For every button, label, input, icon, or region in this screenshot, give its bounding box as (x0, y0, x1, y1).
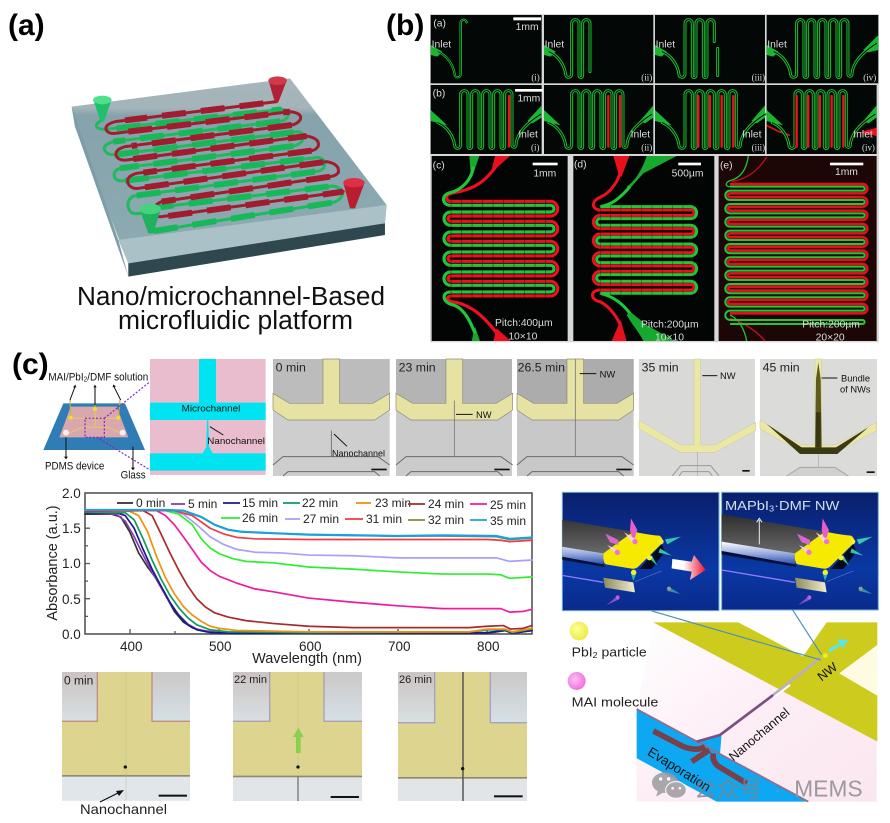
micrograph: 45 min: Bundle (841, 373, 870, 383)
row a: panel i: 1mm (516, 22, 539, 33)
legend: PbI2 particle: PbI (572, 646, 591, 660)
inset title: MAPbI (725, 499, 763, 513)
row a: panel ii (544, 15, 653, 83)
legend: MAI molecule: MAI molecule (572, 695, 658, 709)
legend: 25 min (490, 498, 526, 512)
legend: 0 min (136, 496, 165, 510)
glass plate (43, 403, 145, 450)
row b: panel iv: Inlet (853, 130, 873, 141)
row a: panel i: (i) (531, 73, 540, 83)
x axis tick labels: 600 (299, 639, 322, 654)
micrograph: 35 min: 35 min (642, 360, 679, 374)
row a: panel iv: Inlet (767, 39, 787, 50)
watermark: MEMS (794, 775, 863, 801)
inlet cone: green rear (93, 96, 112, 122)
row a: panel i: Inlet (432, 39, 451, 50)
legend (117, 496, 526, 528)
panel d: pitch 200 um: 10×10 (655, 333, 684, 344)
diagram: pink microchannel and nanochannel: Microchannel (182, 404, 240, 414)
green channel (96, 109, 342, 232)
legend: 32 min (428, 513, 464, 527)
diagram: pink microchannel and nanochannel (150, 359, 266, 475)
row a: panel iv (767, 15, 878, 83)
panel: fluorescence micrographs (b) (430, 14, 879, 344)
row b: panel i: Inlet (518, 130, 538, 141)
y axis tick labels: 1.5 (62, 521, 81, 536)
label: nanochannel with arrow: Nanochannel (80, 801, 167, 817)
micrograph: 26.5 min: 26.5 min (518, 360, 565, 374)
legend: MAI molecule (568, 672, 658, 709)
x axis tick labels: 500 (209, 639, 232, 654)
inset title: 3 (769, 505, 775, 514)
schematic: PDMS device on glass (43, 371, 150, 481)
legend: 5 min (188, 497, 217, 511)
y axis tick labels: 1.0 (62, 556, 81, 571)
micrograph: 35 min (639, 359, 756, 476)
row a: panel ii: (ii) (641, 73, 652, 83)
panel e: pitch 200 um, 20x20: Pitch:200µm (802, 320, 860, 331)
connector lines (652, 610, 822, 660)
row b: panel iii: (iii) (752, 143, 765, 153)
red channel (106, 102, 343, 217)
panel d: pitch 200 um: 500µm (672, 169, 703, 180)
micrograph: top-view 0 min: 0 min (64, 673, 93, 687)
row b: panel ii: (ii) (641, 143, 652, 153)
panel e: pitch 200 um, 20x20: 20×20 (816, 333, 845, 344)
panel d: pitch 200 um (573, 156, 714, 344)
solution label: /DMF solution (87, 371, 148, 383)
row a: panel i: (a) (433, 18, 446, 29)
label: (a): (a) (8, 9, 45, 42)
watermark (652, 772, 863, 803)
micrograph: 35 min: NW (720, 371, 736, 381)
chip body (72, 78, 387, 277)
micrograph: 23 min: NW (476, 410, 492, 420)
micrograph: 0 min: 0 min (276, 360, 306, 374)
inset: growth step 1 (562, 492, 720, 612)
panel c: pitch 400 um: Pitch:400µm (495, 318, 553, 329)
arrow: direction of growth (672, 555, 706, 580)
label: Nanochannel: Nanochannel (726, 705, 792, 764)
solution label: 2 (84, 377, 87, 384)
micrograph: 26.5 min: NW (600, 370, 615, 380)
panel e: pitch 200 um, 20x20: 1mm (835, 167, 858, 178)
chart: absorbance versus wavelength (45, 486, 532, 667)
panel d: pitch 200 um: Pitch:200µm (641, 320, 699, 331)
legend: 22 min (302, 496, 338, 510)
row b: panel ii: Inlet (631, 130, 650, 141)
legend: 27 min (303, 512, 339, 526)
y axis tick labels: 2.0 (62, 486, 81, 501)
diagram: pink microchannel and nanochannel: Nanochannel (207, 436, 265, 446)
y axis tick labels: 0.0 (62, 627, 81, 642)
row b: panel i: (i) (531, 143, 539, 153)
y axis title: Absorbance (a.u.) (45, 505, 61, 621)
x axis title: Wavelength (nm) (252, 651, 362, 667)
arrows (64, 384, 135, 470)
micrograph: 45 min: 45 min (763, 360, 800, 374)
outlet cone: red front (343, 178, 365, 208)
row b: panel ii (544, 85, 653, 154)
row a: panel iii (655, 15, 765, 83)
y axis tick labels: 0.5 (62, 592, 81, 607)
y axis tick labels (62, 486, 81, 642)
panel: nanowire growth mechanism (530, 492, 878, 803)
panel c: pitch 400 um: 10×10 (508, 331, 538, 342)
inset: growth step 2 (722, 492, 878, 610)
micrograph: 45 min: of NWs (840, 385, 871, 395)
micrograph: 0 min (273, 359, 390, 476)
micrograph: top-view 22 min: 22 min (234, 674, 267, 686)
legend: PbI2 particle (570, 622, 647, 660)
row a: panel iii: (iii) (752, 73, 765, 83)
panel e: pitch 200 um, 20x20: (e) (720, 161, 733, 172)
absorbance curves (85, 510, 532, 633)
channel pattern (63, 387, 126, 436)
x axis tick labels (120, 639, 500, 654)
row b: panel iv: (iv) (862, 143, 875, 153)
arrow: NW label pointer (757, 518, 762, 544)
panel: 3D microfluidic chip (72, 76, 387, 277)
row b: panel i (431, 85, 543, 154)
panel c: pitch 400 um: 1mm (533, 169, 556, 180)
row b: panel iv (767, 85, 877, 154)
legend: 24 min (428, 497, 464, 511)
micrograph: top-view 0 min (62, 672, 190, 801)
outlet cone: red rear (268, 76, 287, 102)
micrograph: 23 min: 23 min (399, 360, 436, 374)
PDMS label: PDMS device (45, 460, 104, 472)
row b: panel i: (b) (433, 88, 445, 99)
legend: 15 min (242, 496, 278, 510)
plot frame and ticks (85, 493, 532, 634)
legend: 23 min (375, 496, 411, 510)
caption: platform title: microfluidic platform (118, 307, 353, 335)
micrograph: 26.5 min (517, 359, 634, 476)
caption: platform title (77, 283, 385, 335)
label: Evaporation: Evaporation (645, 744, 713, 795)
watermark: 公众号 (694, 777, 762, 803)
PDMS block (59, 407, 128, 437)
micrograph: top-view 26 min: 26 min (399, 674, 432, 686)
row b: panel iii (655, 85, 765, 154)
row b: panel i: 1mm (517, 94, 540, 105)
x axis tick labels: 800 (477, 639, 500, 654)
watermark: · (774, 779, 781, 801)
evaporation arrows (653, 731, 747, 783)
micrograph: 0 min: Nanochannel (332, 448, 385, 458)
row b: panel iii: Inlet (742, 130, 762, 141)
row a: panel iii: Inlet (656, 39, 675, 50)
label: (b): (b) (386, 9, 424, 42)
legend: PbI2 particle: particle (598, 646, 647, 660)
solution label: MAI/PbI (48, 371, 86, 383)
micrograph: top-view 22 min (233, 672, 362, 801)
panel c: pitch 400 um (432, 156, 568, 342)
label: (c): (c) (12, 348, 49, 381)
row a: panel i (431, 15, 542, 83)
icon: nanowire tip and growth arrow (823, 639, 848, 658)
legend: 31 min (366, 512, 402, 526)
legend: 35 min (490, 514, 526, 528)
legend: 26 min (242, 511, 278, 525)
inset title: ·DMF NW (774, 499, 839, 513)
x axis tick labels: 400 (120, 639, 143, 654)
panel e: pitch 200 um, 20x20 (719, 156, 877, 344)
legend: PbI2 particle: 2 (593, 651, 598, 660)
glass label: Glass (121, 469, 146, 481)
row a: panel ii: Inlet (545, 39, 564, 50)
zoom indicator (85, 382, 150, 470)
micrograph frame background (430, 14, 879, 342)
inlet cone: green front (139, 204, 161, 233)
x axis tick labels: 700 (388, 639, 411, 654)
label: nanochannel with arrow (80, 790, 167, 817)
panel c: pitch 400 um: (c) (433, 161, 445, 172)
panel d: pitch 200 um: (d) (574, 160, 587, 171)
perspective channel view (637, 622, 877, 802)
label: NW: NW (815, 660, 840, 684)
micrograph: 23 min (396, 359, 513, 476)
micrograph: top-view 26 min (398, 672, 527, 801)
micrograph: 45 min (760, 359, 877, 476)
row a: panel iv: (iv) (863, 73, 876, 83)
caption: platform title: Nano/microchannel-Based (77, 283, 385, 311)
